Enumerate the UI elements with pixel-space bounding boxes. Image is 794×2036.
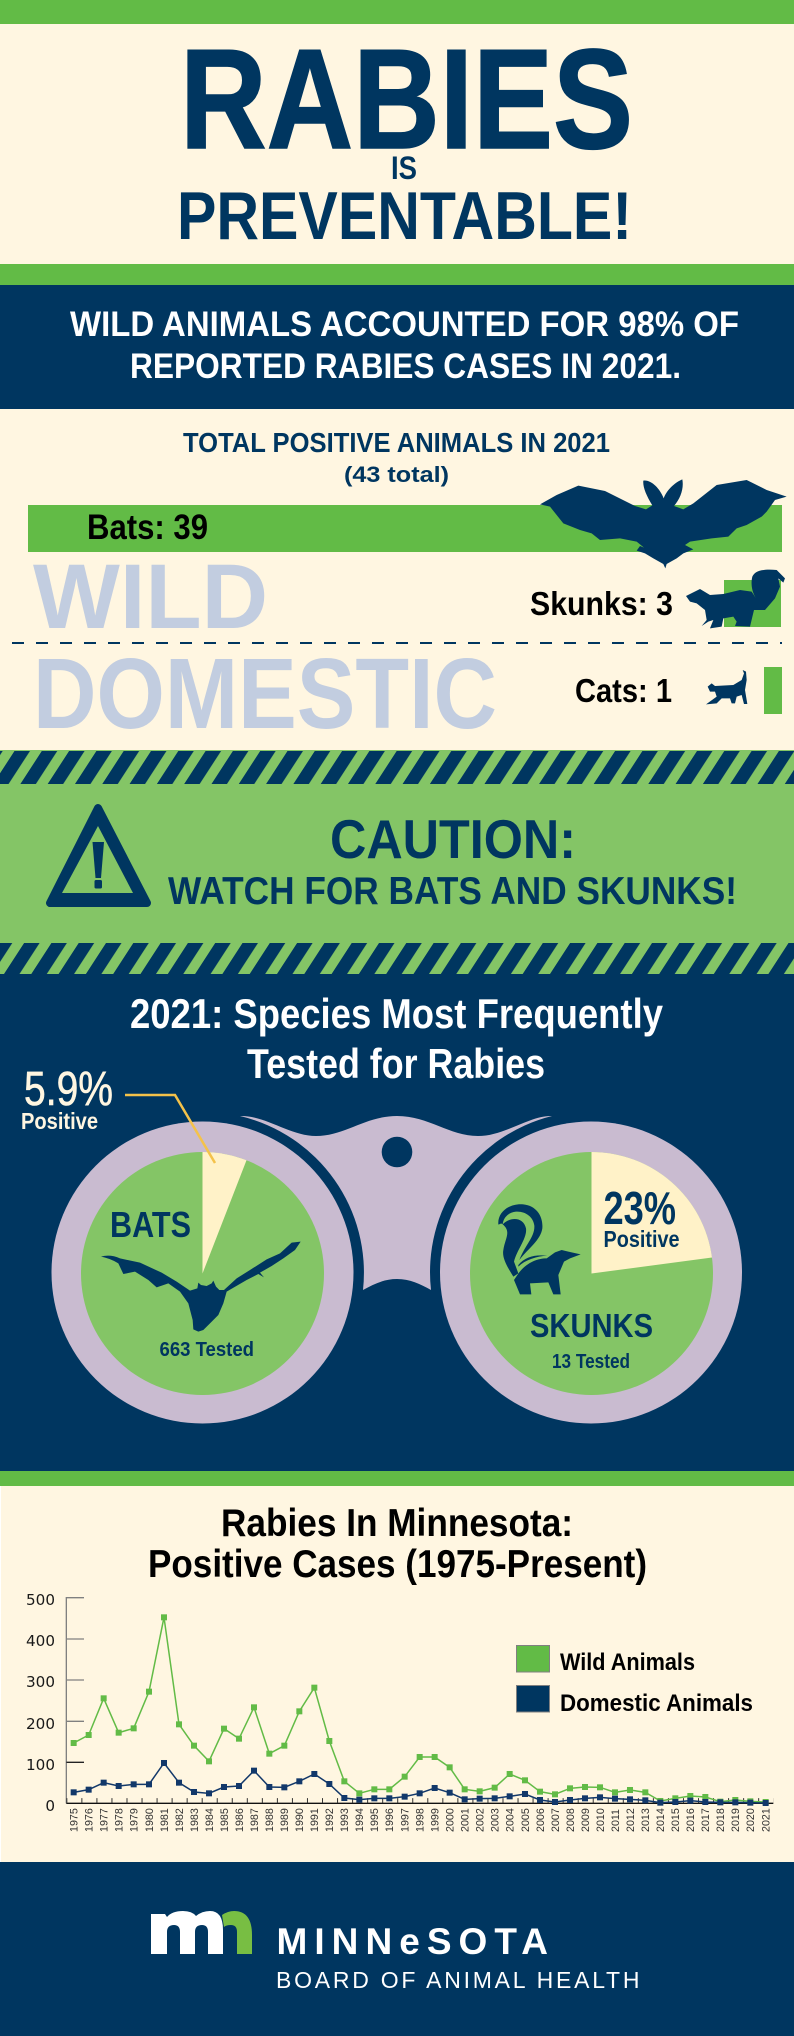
title: is: IS bbox=[391, 150, 417, 186]
x axis year labels: 1992 bbox=[324, 1808, 336, 1832]
binoculars strap hole bbox=[382, 1137, 412, 1167]
text: Board of Animal Health: BOARD OF ANIMAL HEALTH bbox=[276, 1967, 640, 1993]
x axis year labels: 2018 bbox=[715, 1808, 727, 1832]
x axis year labels: 1998 bbox=[414, 1808, 426, 1832]
x axis year labels: 2005 bbox=[520, 1808, 532, 1832]
title: Preventable: PREVENTABLE! bbox=[177, 178, 632, 254]
label: bats: BATS bbox=[110, 1204, 191, 1245]
legend: Domestic Animals bbox=[560, 1690, 753, 1717]
statement line 1: WILD ANIMALS ACCOUNTED FOR 98% OF bbox=[70, 305, 739, 344]
x axis year labels: 1999 bbox=[430, 1808, 442, 1832]
panel: caution banner bbox=[0, 750, 794, 975]
x axis year labels: 2013 bbox=[640, 1808, 652, 1832]
y axis labels: 400 bbox=[26, 1632, 55, 1650]
heading: total positive animals: TOTAL POSITIVE ANIMALS IN 2021 bbox=[183, 427, 610, 458]
chart title line 1: Rabies In Minnesota: bbox=[221, 1502, 573, 1545]
x axis year labels: 1975 bbox=[68, 1808, 80, 1832]
label: skunks: SKUNKS bbox=[530, 1307, 653, 1344]
panel: total positive animals bbox=[0, 409, 794, 750]
wild category label: WILD bbox=[33, 546, 268, 648]
x axis year labels: 1990 bbox=[294, 1808, 306, 1832]
x axis year labels: 2017 bbox=[700, 1808, 712, 1832]
y axis labels: 100 bbox=[26, 1756, 55, 1774]
label: cats 1: Cats: 1 bbox=[575, 672, 672, 709]
x axis year labels: 1978 bbox=[114, 1808, 126, 1832]
series: wild animals bbox=[74, 1617, 766, 1802]
label: positive: Positive bbox=[604, 1226, 680, 1252]
icon: skunk silhouette bbox=[686, 570, 785, 628]
logo: Minnesota mark bbox=[151, 1911, 252, 1954]
x axis year labels: 1982 bbox=[174, 1808, 186, 1832]
x axis year labels: 2019 bbox=[730, 1808, 742, 1832]
x axis year labels bbox=[68, 1808, 772, 1832]
heading: caution: CAUTION: bbox=[330, 808, 576, 870]
x axis year labels: 2016 bbox=[685, 1808, 697, 1832]
icon: bat silhouette bbox=[540, 479, 787, 568]
x axis year labels: 2007 bbox=[550, 1808, 562, 1832]
y axis labels bbox=[26, 1591, 55, 1815]
label: 13 tested: 13 Tested bbox=[552, 1351, 630, 1373]
panel: line chart rabies in Minnesota bbox=[0, 1471, 794, 1862]
panel: title header bbox=[0, 0, 794, 285]
callout: 5.9 percent positive bbox=[21, 1063, 215, 1163]
heading line 1: 2021: Species Most Frequently bbox=[130, 990, 664, 1037]
callout: 5.9 percent positive: Positive bbox=[21, 1108, 98, 1134]
x axis year labels: 1985 bbox=[219, 1808, 231, 1832]
text: Minnesota: MINNeSOTA bbox=[276, 1921, 548, 1962]
x axis year labels: 1980 bbox=[144, 1808, 156, 1832]
x axis year labels: 1988 bbox=[264, 1808, 276, 1832]
icon: cat silhouette bbox=[706, 670, 747, 704]
heading line 2: Tested for Rabies bbox=[247, 1040, 545, 1087]
x axis year labels: 1986 bbox=[234, 1808, 246, 1832]
bar: cats bbox=[764, 667, 782, 714]
x axis year labels: 2021 bbox=[760, 1808, 772, 1832]
label: skunks 3: Skunks: 3 bbox=[530, 585, 673, 622]
lens: skunks pie chart bbox=[440, 1122, 742, 1424]
x axis year labels: 2001 bbox=[460, 1808, 472, 1832]
text: watch for bats and skunks: WATCH FOR BATS AND SKUNKS! bbox=[168, 870, 737, 913]
x axis year labels: 1977 bbox=[98, 1808, 110, 1832]
panel: footer bbox=[0, 1862, 794, 2036]
x axis year labels: 1995 bbox=[369, 1808, 381, 1832]
x axis year labels: 2000 bbox=[444, 1808, 456, 1832]
binoculars bridge bbox=[240, 1116, 552, 1290]
x axis year labels: 2003 bbox=[490, 1808, 502, 1832]
label: bats 39: Bats: 39 bbox=[87, 508, 208, 547]
x axis year labels: 2010 bbox=[595, 1808, 607, 1832]
x axis year labels: 2004 bbox=[504, 1808, 516, 1832]
statement line 2: REPORTED RABIES CASES IN 2021. bbox=[130, 347, 681, 386]
x axis year labels: 1983 bbox=[189, 1808, 201, 1832]
value: 23 percent: 23% bbox=[604, 1182, 676, 1234]
lens: bats pie chart bbox=[52, 1122, 354, 1424]
y axis labels: 200 bbox=[26, 1715, 55, 1733]
x axis year labels: 1987 bbox=[249, 1808, 261, 1832]
panel: species most frequently tested bbox=[0, 974, 794, 1471]
icon: flying bat bbox=[101, 1242, 301, 1332]
x axis year labels: 1994 bbox=[354, 1808, 366, 1832]
y axis labels: 500 bbox=[26, 1591, 55, 1609]
chart title line 2: Positive Cases (1975-Present) bbox=[148, 1543, 647, 1586]
x axis year labels: 1993 bbox=[339, 1808, 351, 1832]
panel: wild animals statement bbox=[0, 285, 794, 409]
line chart plot bbox=[66, 1598, 773, 1803]
x axis year labels: 1984 bbox=[204, 1808, 216, 1832]
x axis year labels: 1997 bbox=[400, 1808, 412, 1832]
x axis year labels: 2020 bbox=[745, 1808, 757, 1832]
x axis year labels: 2014 bbox=[655, 1808, 667, 1832]
callout: 5.9 percent positive: 5.9% bbox=[24, 1063, 113, 1116]
label: 663 tested: 663 Tested bbox=[160, 1339, 254, 1361]
series: domestic animals bbox=[74, 1763, 766, 1803]
x axis year labels: 1976 bbox=[84, 1808, 96, 1832]
x axis year labels: 2012 bbox=[625, 1808, 637, 1832]
icon: skunk bbox=[498, 1204, 581, 1294]
title: Rabies: RABIES bbox=[180, 20, 633, 179]
legend: Wild Animals bbox=[560, 1649, 695, 1676]
bar: skunks bbox=[724, 580, 781, 627]
x axis year labels: 2006 bbox=[535, 1808, 547, 1832]
x axis year labels: 1996 bbox=[384, 1808, 396, 1832]
bar: bats bbox=[28, 505, 782, 552]
y axis labels: 300 bbox=[26, 1673, 55, 1691]
domestic category label: DOMESTIC bbox=[33, 638, 497, 750]
legend bbox=[516, 1646, 753, 1717]
x axis year labels: 2009 bbox=[580, 1808, 592, 1832]
x axis year labels: 2002 bbox=[474, 1808, 486, 1832]
subheading: 43 total: (43 total) bbox=[344, 462, 449, 487]
x axis year labels: 1979 bbox=[128, 1808, 140, 1832]
x axis year labels: 1989 bbox=[279, 1808, 291, 1832]
x axis year labels: 2015 bbox=[670, 1808, 682, 1832]
x axis year labels: 1981 bbox=[159, 1808, 171, 1832]
x axis year labels: 2011 bbox=[610, 1809, 622, 1832]
icon: warning triangle bbox=[50, 808, 147, 903]
y axis labels: 0 bbox=[45, 1797, 55, 1815]
x axis year labels: 1991 bbox=[309, 1808, 321, 1832]
x axis year labels: 2008 bbox=[565, 1808, 577, 1832]
